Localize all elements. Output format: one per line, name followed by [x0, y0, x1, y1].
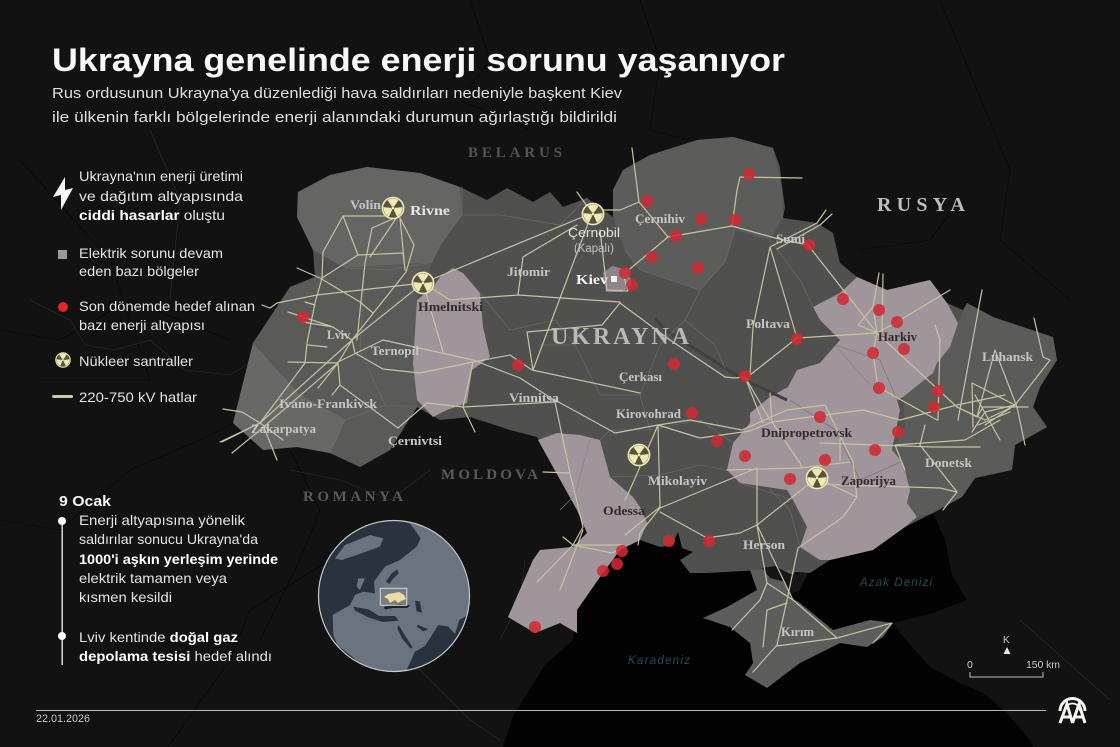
- legend: target text: Son dönemde hedef alınan: [79, 298, 255, 314]
- event text: outages: [79, 512, 278, 605]
- city and region labels: Çerkası: [619, 370, 663, 384]
- city and region labels: Kirovohrad: [616, 407, 681, 421]
- event text: Lviv gas storage: [79, 629, 272, 664]
- timeline panel: [58, 494, 278, 665]
- legend: nuclear text: Nükleer santraller: [79, 353, 193, 369]
- country labels: [303, 145, 966, 505]
- city and region labels: Luhansk: [982, 350, 1033, 364]
- plant: Hmelnitski: [412, 272, 434, 294]
- city and region labels: Ivano-Frankivsk: [279, 397, 377, 411]
- date: 22.01.2026: [36, 713, 90, 725]
- subtitle: Rus ordusunun Ukrayna'ya düzenlediği hava saldırıları nedeniyle başkent Kiev: [52, 85, 623, 102]
- city and region labels: Sumi: [776, 232, 806, 246]
- legend: nuclear icon: [56, 353, 70, 367]
- damage note: ciddi hasarlar oluştu: [79, 207, 225, 223]
- damage note: Ukrayna'nın enerji üretimi: [79, 168, 243, 184]
- sea labels: Karadeniz: [628, 655, 690, 667]
- subtitle: ile ülkenin farklı bölgelerinde enerji alanındaki durumun ağırlaştığı bildirildi: [52, 109, 617, 126]
- city and region labels: (Kapalı): [574, 243, 614, 255]
- region with electricity problem: Kharkiv, Dnipropetrovsk, Zaporijya: [727, 277, 958, 560]
- city and region labels: Çernihiv: [635, 212, 686, 226]
- damage note: [79, 168, 243, 223]
- Odessa/Dniester inner line: [560, 345, 870, 510]
- scale and north arrow: 150 km: [1026, 659, 1060, 671]
- city and region labels: [251, 198, 1033, 639]
- nuclear plants: [382, 197, 828, 489]
- legend: line text: 220-750 kV hatlar: [79, 389, 197, 405]
- map labels: [251, 145, 1033, 639]
- power lines 220-750 kV: [220, 148, 1050, 672]
- legend: target text: [79, 298, 255, 333]
- city and region labels: Kiev: [576, 273, 608, 288]
- city and region labels: Zaporijya: [841, 474, 897, 488]
- region with electricity problem: Hmelnitski: [413, 268, 490, 417]
- city and region labels: Volin: [350, 198, 381, 212]
- plant: South Ukraine: [628, 444, 650, 466]
- city and region labels: Ternopil: [371, 344, 420, 358]
- country labels: BELARUS: [468, 145, 562, 161]
- city and region labels: Odessa: [603, 504, 646, 518]
- city and region labels: Çernobil: [568, 225, 620, 240]
- legend: line swatch: [52, 395, 73, 398]
- city and region labels: Donetsk: [925, 456, 972, 470]
- city and region labels: Jitomir: [507, 265, 550, 279]
- legend: affected regions text: Elektrik sorunu devam: [79, 245, 223, 261]
- city and region labels: Dnipropetrovsk: [761, 426, 852, 440]
- legend: affected regions text: [79, 245, 223, 279]
- legend: target text: bazı enerji altyapısı: [79, 317, 205, 333]
- city and region labels: Herson: [743, 538, 785, 552]
- Kiev capital marker: [611, 276, 617, 282]
- city and region labels: Lviv: [327, 328, 351, 342]
- city and region labels: Harkiv: [878, 330, 918, 344]
- footer line: [36, 710, 1046, 711]
- scale and north arrow: 0: [967, 659, 973, 671]
- oblast borders: [300, 187, 905, 547]
- city and region labels: Poltava: [746, 317, 791, 331]
- seas: [503, 513, 1033, 747]
- sea labels: Azak Denizi: [859, 577, 932, 589]
- legend: affected regions text: eden bazı bölgeler: [79, 263, 199, 279]
- city and region labels: Rivne: [410, 203, 450, 218]
- country labels: UKRAYNA: [551, 324, 690, 350]
- event text: outages: elektrik tamamen veya: [79, 570, 227, 586]
- region with electricity problem: Odessa: [508, 433, 647, 633]
- city and region labels: Çernivtsi: [388, 434, 443, 448]
- timeline date: 9 Ocak: [59, 494, 112, 510]
- Kiev region patch: [603, 266, 632, 292]
- city and region labels: Kırım: [781, 625, 815, 639]
- icon: lightning: [53, 177, 73, 210]
- plant: Zaporijya: [806, 467, 828, 489]
- city and region labels: Zakarpatya: [251, 422, 317, 436]
- damage note: ve dağıtım altyapısında: [79, 188, 243, 204]
- country base: [233, 137, 1057, 633]
- Sivash lagoon: [762, 566, 808, 595]
- Ukraine locator: [380, 588, 407, 605]
- locator globe: [318, 520, 470, 672]
- scale and north arrow: [967, 635, 1060, 677]
- country labels: MOLDOVA: [441, 467, 538, 483]
- event text: Lviv gas storage: depolama tesisi hedef alındı: [79, 648, 272, 664]
- title: Ukrayna genelinde enerji sorunu yaşanıyor: [52, 42, 785, 78]
- plant: Rivne: [382, 197, 404, 219]
- Crimea: [703, 570, 893, 688]
- scale and north arrow: K: [1003, 635, 1010, 646]
- legend: affected regions swatch: [58, 250, 67, 259]
- map of Ukraine: [233, 137, 1057, 688]
- timeline rail: [58, 517, 66, 665]
- legend panel: [52, 168, 255, 405]
- sea labels: [628, 577, 932, 667]
- western regions lighter: [297, 167, 462, 270]
- city and region labels: Vinnitsa: [509, 391, 560, 405]
- country labels: ROMANYA: [303, 489, 403, 505]
- city and region labels: Mikolayiv: [648, 474, 708, 488]
- country labels: RUSYA: [877, 194, 966, 216]
- targeted energy infrastructure points: [297, 168, 944, 633]
- event text: outages: kısmen kesildi: [79, 589, 172, 605]
- city and region labels: Hmelnitski: [418, 300, 484, 314]
- logo: AA: [1060, 698, 1085, 723]
- event text: outages: 1000'i aşkın yerleşim yerinde: [79, 551, 278, 567]
- legend: target dot: [58, 302, 68, 312]
- event text: outages: Enerji altyapısına yönelik: [79, 512, 246, 528]
- subtitle: [52, 85, 623, 126]
- event text: Lviv gas storage: Lviv kentinde doğal gaz: [79, 629, 238, 645]
- Dnieper river: [655, 318, 787, 400]
- event text: outages: saldırılar sonucu Ukrayna'da: [79, 531, 258, 547]
- plant: Chernobyl: [582, 203, 604, 225]
